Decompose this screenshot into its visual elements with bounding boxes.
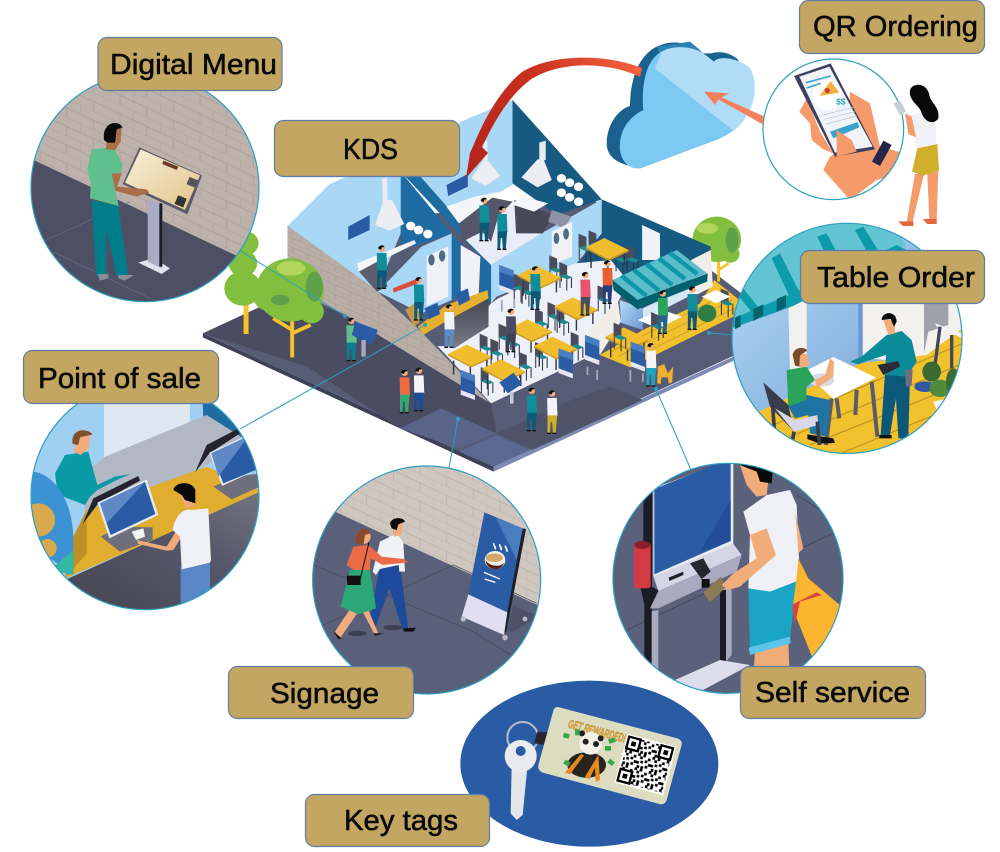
kiosk stand bbox=[138, 198, 170, 274]
ring bbox=[732, 223, 962, 453]
label: Self service bbox=[740, 666, 926, 718]
arrow from phone to cloud bbox=[704, 92, 763, 125]
panel: table order bbox=[730, 222, 967, 458]
label: QR Ordering: QR Ordering bbox=[813, 11, 978, 43]
panel: self service bbox=[610, 458, 847, 698]
customer POS terminal bbox=[83, 476, 158, 552]
ring bbox=[31, 74, 259, 302]
man walking bbox=[368, 518, 416, 632]
label: QR Ordering bbox=[800, 0, 984, 54]
label: Digital Menu: Digital Menu bbox=[110, 49, 277, 81]
right table and chair bbox=[924, 304, 962, 368]
label: Self service: Self service bbox=[755, 677, 910, 709]
woman walking bbox=[333, 529, 408, 639]
tree: back left bbox=[224, 231, 261, 334]
kiosk body bbox=[634, 458, 750, 692]
foreground tree bbox=[254, 258, 324, 357]
table bbox=[804, 357, 877, 445]
red arrow from cloud to KDS bbox=[466, 58, 642, 178]
QR code bbox=[616, 735, 675, 794]
dog bbox=[657, 364, 673, 384]
connector: point of sale bbox=[240, 323, 427, 429]
panel: QR ordering bbox=[704, 59, 939, 226]
panel: digital menu bbox=[30, 73, 263, 303]
panda mascot bbox=[563, 729, 616, 782]
floor platform bbox=[203, 200, 793, 472]
restaurant white floor bbox=[437, 260, 629, 403]
ring bbox=[763, 59, 904, 200]
second POS terminal bbox=[195, 429, 260, 499]
label: KDS bbox=[274, 120, 460, 176]
point of sale counter bbox=[405, 288, 489, 348]
customer bbox=[137, 483, 211, 613]
customer bbox=[722, 464, 803, 668]
staff and customers bbox=[346, 198, 698, 434]
key ring bbox=[507, 722, 538, 753]
label: Signage bbox=[228, 666, 414, 718]
key bbox=[505, 740, 537, 820]
pizza display case bbox=[32, 472, 74, 575]
panel: key tags bbox=[460, 681, 718, 847]
connector: digital menu bbox=[239, 250, 347, 318]
kitchen equipment: hoods and shelves bbox=[348, 140, 583, 306]
panel: point of sale bbox=[30, 404, 260, 610]
woman using phone bbox=[893, 85, 939, 226]
ring bbox=[313, 466, 541, 694]
label: Table Order: Table Order bbox=[817, 262, 975, 294]
ring bbox=[31, 382, 259, 610]
potted plant bbox=[914, 362, 957, 410]
label: Point of sale bbox=[24, 350, 218, 404]
man at kiosk bbox=[87, 123, 149, 281]
key tag in hand bbox=[703, 577, 727, 602]
dining tables and chairs bbox=[448, 230, 639, 396]
tag headline: GET REWARDED! bbox=[567, 717, 627, 746]
connector: table order bbox=[707, 331, 735, 335]
kiosk menu screen bbox=[123, 147, 202, 214]
kitchen and restaurant walls bbox=[287, 100, 711, 313]
panel: central isometric restaurant bbox=[203, 100, 793, 472]
connector: self service bbox=[654, 387, 691, 470]
cloud icon bbox=[607, 40, 760, 173]
label: Table Order bbox=[800, 250, 984, 304]
guide dog bbox=[793, 558, 842, 660]
signage board bbox=[461, 512, 538, 640]
tree: right bbox=[692, 217, 741, 282]
digital signage and kiosks bbox=[352, 265, 645, 404]
label: Key tags: Key tags bbox=[344, 805, 458, 837]
phone and hands illustration: $$ bbox=[836, 96, 846, 106]
phone and hands illustration bbox=[794, 63, 905, 200]
cashier bbox=[55, 430, 131, 505]
awning bbox=[730, 222, 907, 329]
tag strap bbox=[534, 732, 557, 746]
key tag card bbox=[538, 707, 682, 804]
chair bbox=[763, 382, 819, 445]
connector: signage bbox=[449, 417, 460, 468]
label: Digital Menu bbox=[98, 38, 282, 90]
label: KDS: KDS bbox=[343, 134, 398, 166]
brick exterior wall bbox=[287, 226, 489, 403]
seated customer bbox=[787, 348, 835, 444]
label: Point of sale: Point of sale bbox=[38, 363, 201, 395]
outdoor deck and awning bbox=[587, 250, 750, 367]
label: Signage: Signage bbox=[270, 678, 379, 710]
ring bbox=[613, 463, 843, 693]
panel: signage bbox=[310, 462, 543, 698]
label: Key tags bbox=[306, 794, 490, 846]
waiter bbox=[850, 313, 917, 438]
